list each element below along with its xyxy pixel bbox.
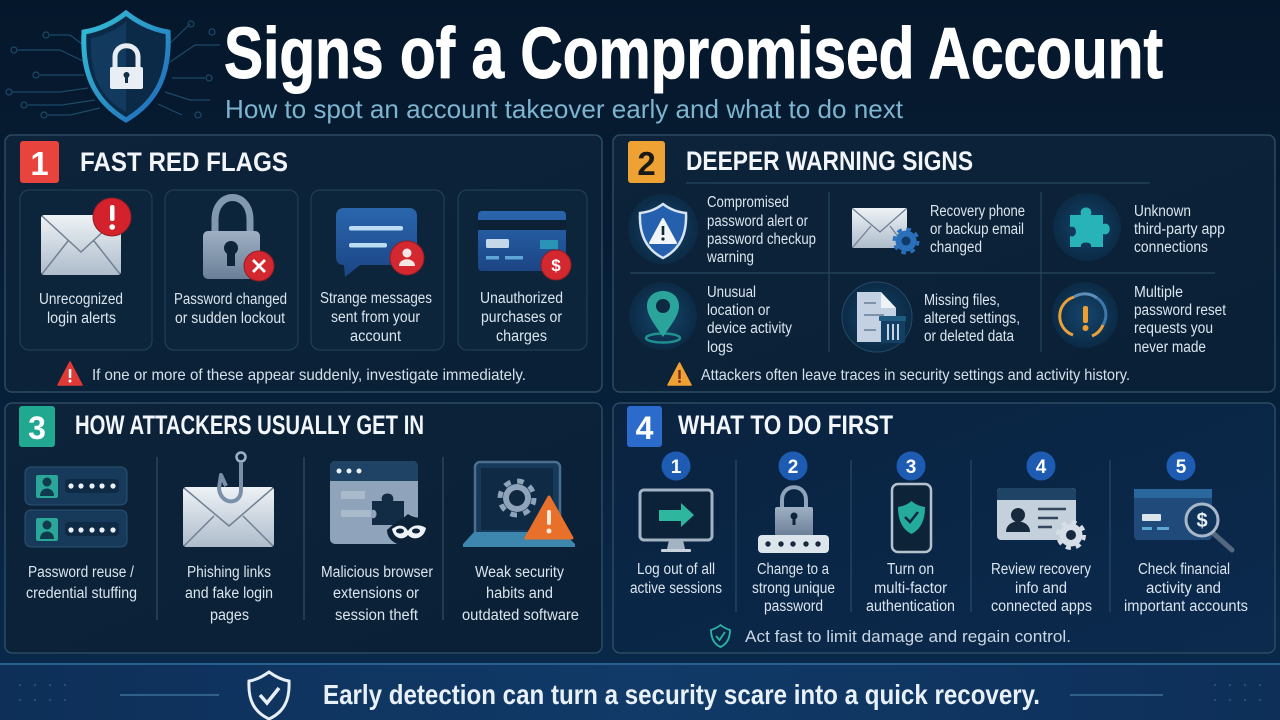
text: compromised password alert: password checkup — [707, 231, 816, 248]
note: investigate immediately — [58, 362, 526, 385]
number 1 — [662, 452, 690, 480]
note: act fast: Act fast to limit damage and regain control. — [745, 627, 1071, 646]
text: unusual location: location or — [707, 302, 770, 319]
text: weak security habits: habits and — [486, 585, 553, 602]
text: third-party app: Unknown — [1134, 203, 1191, 220]
text: password reset requests: requests you — [1134, 320, 1213, 337]
icon: document and trash — [842, 282, 912, 352]
item: password reset requests — [1052, 282, 1227, 356]
text: phishing links: pages — [210, 607, 249, 624]
text: malicious extensions: session theft — [335, 607, 419, 624]
text: log out — [630, 561, 722, 597]
item: third-party app connections — [1053, 193, 1225, 261]
number 5 — [1166, 452, 1196, 480]
text: check financial: activity and — [1146, 580, 1221, 597]
card: unrecognized login alerts — [20, 190, 152, 350]
icon: envelope with gear — [852, 208, 918, 253]
text: compromised password alert — [706, 194, 816, 266]
text: password reuse — [26, 564, 137, 602]
text: password changed or sudden lockout — [174, 291, 287, 327]
text: multi-factor: multi-factor — [874, 580, 947, 597]
text: password reset requests: never made — [1134, 339, 1206, 356]
icon: red warning triangle — [58, 362, 82, 385]
icon: circuit lines around header shield — [6, 21, 220, 118]
text: unauthorized purchases: Unauthorized — [480, 290, 563, 307]
text: unrecognized login alerts — [39, 291, 123, 327]
text: password changed or sudden lockout: Password changed — [174, 291, 287, 308]
text: log out: Log out of all — [637, 561, 715, 578]
text: strange messages — [320, 290, 432, 345]
text: weak security habits: Weak security — [475, 564, 564, 581]
number 2 — [778, 452, 808, 480]
badge: 1: 1 — [30, 145, 49, 182]
badge: 2: 2 — [637, 145, 656, 182]
card: password changed — [165, 190, 298, 350]
panel: what to do first — [613, 403, 1275, 653]
text: unauthorized purchases: charges — [496, 328, 547, 345]
text: missing files — [924, 292, 1020, 345]
card: strange messages — [311, 190, 444, 350]
panel: deeper warning signs — [613, 135, 1275, 392]
icon: card with magnifier: $ — [1196, 510, 1208, 532]
text: recovery phone — [930, 203, 1025, 256]
item: compromised password alert — [628, 194, 816, 266]
text: password reuse: credential stuffing — [26, 585, 137, 602]
number 4: 4 — [1036, 457, 1047, 478]
text: strange messages: sent from your — [331, 309, 420, 326]
icon: card with magnifier — [1134, 489, 1232, 550]
text: malicious extensions: extensions or — [333, 585, 419, 602]
text: strong password: Change to a — [757, 561, 829, 578]
icon: credit card with dollar — [478, 211, 571, 280]
subtitle: How to spot an account takeover early and what to do next — [225, 94, 904, 124]
step 5: check financial — [1124, 452, 1248, 615]
text: check financial: Check financial — [1138, 561, 1230, 578]
text: multi-factor: Turn on — [887, 561, 934, 578]
card: unauthorized purchases — [458, 190, 587, 350]
icon: orange warning triangle — [668, 363, 691, 385]
icon: puzzle piece — [1053, 193, 1121, 261]
icon: envelope with alert — [41, 198, 131, 275]
badge: 3: 3 — [28, 410, 46, 446]
text: password reset requests: password reset — [1134, 302, 1227, 319]
heading: what to do first: WHAT TO DO FIRST — [678, 410, 893, 440]
text: compromised password alert: warning — [706, 249, 754, 266]
badge: 4 — [627, 406, 662, 447]
note: investigate immediately: If one or more of these appear suddenly, investigate immediately. — [92, 367, 526, 384]
panel: fast red flags — [5, 135, 602, 392]
icon: footer check shield — [249, 672, 289, 719]
text: unrecognized login alerts: Unrecognized — [39, 291, 123, 308]
text: third-party app: third-party app — [1134, 221, 1225, 238]
icon: reset clock with alert — [1052, 282, 1118, 348]
item: password reuse — [25, 467, 137, 602]
text: unauthorized purchases: purchases or — [481, 309, 562, 326]
icon: laptop with gear and warning — [463, 462, 575, 547]
icon: phone with shield — [892, 484, 931, 552]
text: third-party app — [1134, 203, 1225, 256]
item: unusual location — [629, 282, 792, 356]
text: unrecognized login alerts: login alerts — [47, 310, 116, 327]
icon: chat bubble with person — [336, 208, 424, 277]
badge: 1 — [20, 141, 59, 183]
text: password reuse: Password reuse / — [28, 564, 135, 581]
text: unusual location: logs — [707, 339, 733, 356]
text: compromised password alert: password alert or — [707, 213, 808, 230]
footer banner — [0, 663, 1280, 720]
text: third-party app: connections — [1134, 239, 1208, 256]
text: unusual location: Unusual — [707, 284, 756, 301]
text: malicious extensions: Malicious browser — [321, 564, 433, 581]
text: strange messages: Strange messages — [320, 290, 432, 307]
panel: how attackers get in — [5, 403, 602, 653]
item: recovery phone changed — [852, 203, 1025, 256]
icon: header shield with padlock — [84, 13, 168, 120]
icon: browser with puzzle and mask — [330, 461, 431, 546]
text: check financial — [1124, 561, 1248, 615]
badge: 3 — [19, 406, 55, 447]
heading: deeper warning signs: DEEPER WARNING SIGNS — [686, 146, 973, 176]
text: password reset requests: Multiple — [1134, 284, 1183, 301]
icon: padlock with x — [203, 198, 274, 281]
icon: padlock with password bar — [758, 487, 829, 553]
icon: shield warning — [628, 194, 698, 264]
text: phishing links: and fake login — [185, 585, 273, 602]
text: password changed or sudden lockout: or sudden lockout — [175, 310, 286, 327]
text: weak security habits — [462, 564, 579, 624]
icon: credit card with dollar: $ — [551, 256, 561, 275]
text: weak security habits: outdated software — [462, 607, 579, 624]
text: check financial: important accounts — [1124, 598, 1248, 615]
text: missing files: or deleted data — [924, 328, 1014, 345]
item: missing files — [842, 282, 1020, 352]
step 2: strong password — [752, 452, 835, 615]
step 4: review recovery — [991, 452, 1092, 615]
heading: fast red flags: FAST RED FLAGS — [80, 147, 288, 177]
item: weak security habits — [462, 462, 579, 624]
badge: 2 — [628, 141, 665, 183]
item: malicious extensions — [321, 461, 433, 624]
step 3: multi-factor authentication — [866, 452, 955, 615]
text: review recovery — [991, 561, 1092, 615]
text: recovery phone: Recovery phone — [930, 203, 1025, 220]
text: compromised password alert: Compromised — [707, 194, 789, 211]
text: missing files: altered settings, — [924, 310, 1020, 327]
note: attackers leave traces: Attackers often leave traces in security settings and activity history. — [701, 367, 1130, 384]
number 2: 2 — [788, 457, 798, 478]
text: review recovery: connected apps — [991, 598, 1092, 615]
number 1: 1 — [671, 457, 682, 478]
text: multi-factor — [866, 561, 955, 615]
text: password reset requests — [1134, 284, 1227, 356]
text: review recovery: Review recovery — [991, 561, 1091, 578]
number 3: 3 — [906, 457, 916, 478]
heading: how attackers usually get in: HOW ATTACKERS USUALLY GET IN — [75, 410, 424, 440]
icon: id card with gear — [997, 488, 1084, 548]
text: strong password — [752, 561, 835, 615]
text: phishing links: Phishing links — [187, 564, 271, 581]
note: attackers leave traces — [668, 363, 1130, 385]
icon: check shield — [711, 625, 730, 647]
text: unauthorized purchases — [480, 290, 563, 345]
text: missing files: Missing files, — [924, 292, 1000, 309]
text: unusual location: device activity — [707, 320, 792, 337]
text: log out: active sessions — [630, 580, 722, 597]
text: multi-factor: authentication — [866, 598, 955, 615]
text: unusual location — [707, 284, 792, 356]
text: review recovery: info and — [1015, 580, 1067, 597]
text: malicious extensions — [321, 564, 433, 624]
number 5: 5 — [1176, 457, 1187, 478]
badge: 4: 4 — [636, 410, 654, 446]
icon: monitor with arrow — [640, 490, 712, 552]
text: recovery phone: changed — [930, 239, 982, 256]
text: strong password: password — [764, 598, 823, 615]
text: strong password: strong unique — [752, 580, 835, 597]
icon: credential cards — [25, 467, 127, 547]
text: recovery phone: or backup email — [930, 221, 1024, 238]
icon: envelope with hook — [183, 452, 274, 547]
number 3 — [896, 452, 926, 480]
text: phishing links — [185, 564, 273, 624]
footer message: Early detection can turn a security scare into a quick recovery. — [323, 679, 1040, 710]
item: phishing links — [183, 452, 274, 624]
icon: location pin — [629, 282, 697, 350]
step 1: log out — [630, 452, 722, 597]
number 4 — [1026, 452, 1056, 480]
text: strange messages: account — [350, 328, 402, 345]
